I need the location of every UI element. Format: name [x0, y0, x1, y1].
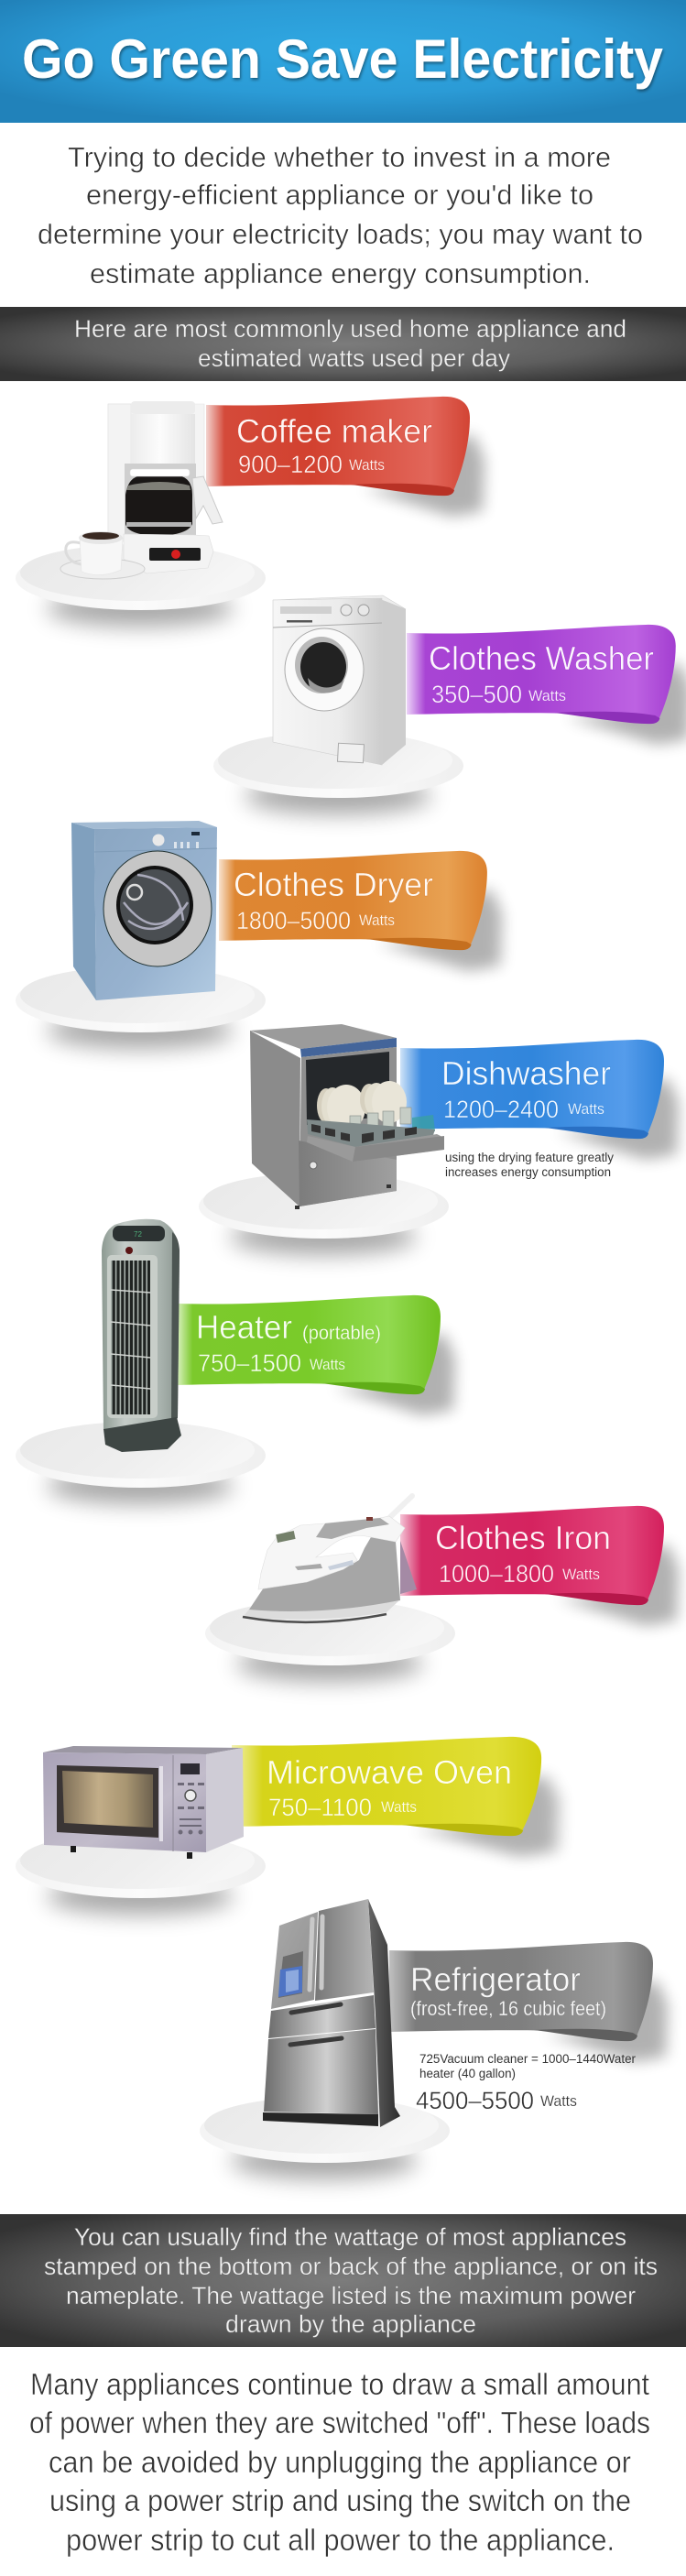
panel: refrigerator — [200, 1899, 668, 2179]
panel: portable heater — [16, 1219, 455, 1504]
intro paragraph: Trying to decide whether to invest in a more — [68, 141, 611, 173]
intro paragraph — [38, 141, 643, 289]
label: water heater wattage: 4500–5500 — [416, 2087, 534, 2114]
label: clothes dryer: Watts — [359, 911, 395, 929]
label: coffee maker: Coffee maker — [236, 412, 432, 450]
ribbon: yellow — [232, 1737, 559, 1857]
icon: microwave — [43, 1746, 244, 1859]
label: clothes iron — [435, 1519, 611, 1588]
label: water heater wattage: Watts — [540, 2092, 577, 2110]
label: microwave oven — [267, 1753, 512, 1821]
ribbon: purple — [407, 625, 686, 745]
dark band: finding the wattage — [0, 2214, 686, 2347]
intro paragraph: determine your electricity loads; you may want to — [38, 218, 643, 250]
label: clothes iron: Watts — [562, 1566, 600, 1583]
ribbon: green — [177, 1295, 455, 1415]
label: clothes washer: 350–500 — [431, 681, 522, 708]
label: dishwasher: 1200–2400 — [443, 1096, 559, 1123]
icon: refrigerator — [263, 1899, 400, 2127]
icon: tower heater — [102, 1219, 181, 1452]
label: heater: (portable) — [302, 1323, 381, 1344]
icon: clothes dryer — [71, 821, 217, 1000]
label: heater: 750–1500 — [198, 1349, 301, 1377]
panel: dishwasher — [199, 1024, 679, 1255]
icon: washing machine — [273, 595, 406, 765]
icon: coffee cup — [60, 531, 145, 579]
closing paragraph: can be avoided by unplugging the appliance or — [49, 2445, 631, 2479]
dark band: appliance list intro: estimated watts used per day — [198, 344, 510, 372]
label: clothes iron: Clothes Iron — [435, 1519, 611, 1556]
note: vacuum cleaner and water heater: 725Vacuum cleaner = 1000–1440Water — [419, 2052, 636, 2066]
ribbon: blue — [400, 1040, 679, 1160]
note: drying feature: increases energy consumption — [445, 1165, 611, 1179]
ribbon: gray — [389, 1942, 668, 2062]
panel: clothes washer — [213, 595, 686, 814]
label: dishwasher: Watts — [568, 1100, 604, 1118]
ribbon: red — [206, 397, 485, 517]
intro paragraph: estimate appliance energy consumption. — [90, 257, 591, 289]
note: drying feature — [445, 1151, 614, 1179]
label: refrigerator: Refrigerator — [410, 1960, 581, 1998]
label: dishwasher — [441, 1054, 611, 1123]
panel: coffee maker — [16, 397, 485, 627]
label: heater: Watts — [310, 1356, 345, 1373]
ribbon: orange — [219, 851, 502, 971]
label: coffee maker — [236, 412, 432, 478]
icon: coffee maker — [108, 401, 223, 573]
ribbon: pink — [400, 1506, 679, 1626]
label: clothes washer: Watts — [528, 687, 566, 704]
closing paragraph: Many appliances continue to draw a small amount — [30, 2367, 649, 2401]
icon part: plates and glasses — [307, 1081, 435, 1147]
label: dishwasher: Dishwasher — [441, 1054, 611, 1092]
dark band: finding the wattage: nameplate. The wattage listed is the maximum power — [66, 2282, 636, 2309]
label: microwave oven: Microwave Oven — [267, 1753, 512, 1791]
closing paragraph — [29, 2367, 650, 2557]
dark band: finding the wattage: You can usually find the wattage of most appliances — [74, 2223, 626, 2251]
label: clothes washer — [429, 639, 654, 708]
panel: microwave oven — [16, 1737, 559, 1915]
icon: steam iron — [243, 1496, 417, 1622]
intro paragraph: energy-efficient appliance or you'd like to — [86, 179, 593, 211]
label: clothes iron: 1000–1800 — [439, 1560, 554, 1588]
label: refrigerator — [410, 1960, 606, 2020]
label: coffee maker: Watts — [349, 456, 385, 474]
note: vacuum cleaner and water heater: heater (40 gallon) — [419, 2067, 516, 2080]
panel: clothes dryer — [16, 821, 502, 1049]
closing paragraph: using a power strip and using the switch on the — [49, 2483, 631, 2517]
label: clothes washer: Clothes Washer — [429, 639, 654, 677]
label: refrigerator: (frost-free, 16 cubic feet) — [410, 1997, 606, 2020]
dark band: finding the wattage: stamped on the bottom or back of the appliance, or on its — [44, 2253, 658, 2280]
dark band: appliance list intro: Here are most commonly used home appliance and — [74, 315, 626, 343]
dark band: appliance list intro — [0, 307, 686, 381]
closing paragraph: power strip to cut all power to the appliance. — [66, 2523, 615, 2557]
note: vacuum cleaner and water heater — [419, 2052, 636, 2080]
label: microwave oven: Watts — [381, 1798, 417, 1816]
dark band: finding the wattage: drawn by the appliance — [225, 2310, 476, 2338]
label: clothes dryer — [234, 866, 433, 934]
label: heater — [196, 1308, 381, 1377]
icon: dishwasher — [250, 1024, 444, 1209]
label: clothes dryer: Clothes Dryer — [234, 866, 433, 903]
panel: clothes iron — [205, 1496, 679, 1682]
label: microwave oven: 750–1100 — [268, 1794, 372, 1821]
icon: tower heater: 72 — [134, 1230, 142, 1239]
label: heater: Heater — [196, 1308, 292, 1346]
header banner — [0, 0, 686, 123]
label: coffee maker: 900–1200 — [238, 451, 343, 478]
title: Go Green Save Electricity — [22, 28, 664, 90]
label: clothes dryer: 1800–5000 — [236, 907, 351, 934]
note: drying feature: using the drying feature greatly — [445, 1151, 614, 1164]
